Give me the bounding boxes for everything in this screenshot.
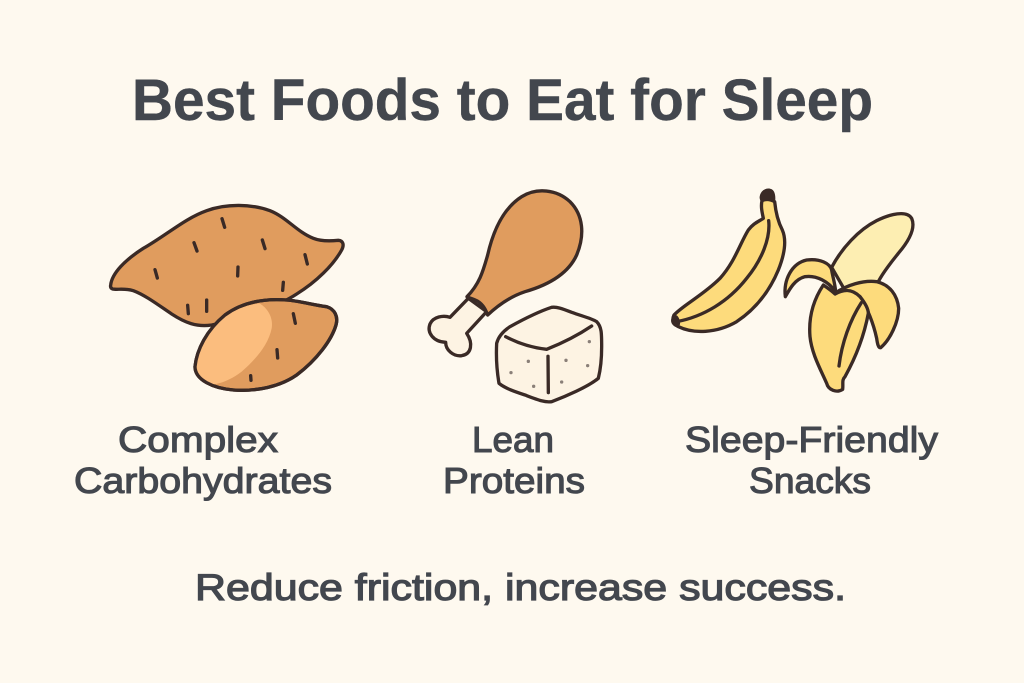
peeled banana xyxy=(785,214,913,391)
icon: sweet potatoes xyxy=(111,205,343,390)
peel front xyxy=(810,285,868,391)
label: complex carbohydrates xyxy=(74,419,332,501)
icon: bananas xyxy=(671,188,913,391)
label: sleep-friendly snacks: Sleep-Friendly xyxy=(685,419,938,460)
label: sleep-friendly snacks: Snacks xyxy=(749,460,871,501)
tagline: Reduce friction, increase success. xyxy=(195,567,846,608)
tofu cube xyxy=(496,307,602,402)
title: Best Foods to Eat for Sleep xyxy=(132,68,873,133)
small sweet potato xyxy=(195,300,337,390)
label: lean proteins: Proteins xyxy=(443,460,585,501)
icon: chicken drumstick and tofu xyxy=(429,191,602,402)
label: complex carbohydrates: Complex xyxy=(118,419,278,460)
label: complex carbohydrates: Carbohydrates xyxy=(74,460,332,501)
large sweet potato xyxy=(111,205,343,326)
whole banana xyxy=(671,188,785,331)
peel back xyxy=(835,281,899,348)
chicken drumstick xyxy=(429,191,582,356)
label: lean proteins xyxy=(443,419,585,501)
peel left flap xyxy=(785,260,836,297)
label: sleep-friendly snacks xyxy=(685,419,938,501)
label: lean proteins: Lean xyxy=(472,419,554,460)
banana flesh xyxy=(832,214,913,293)
